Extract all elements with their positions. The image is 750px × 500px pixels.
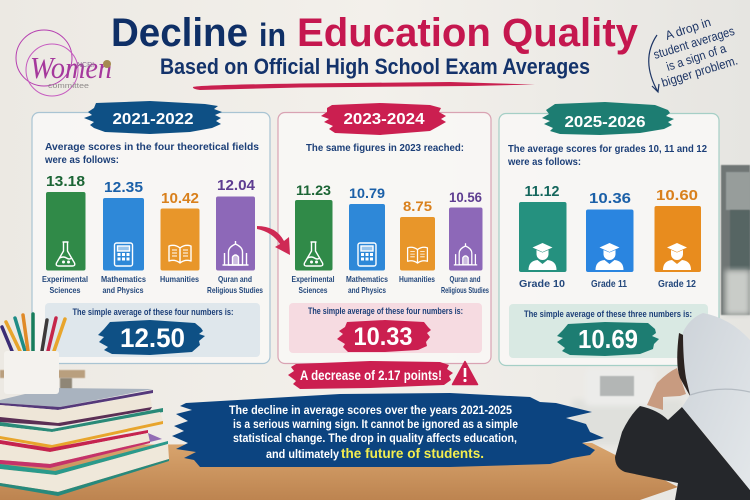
title [111,11,639,55]
bar: Humanities 10.42: Humanities [160,274,199,284]
bar chart: 2023-2024 [292,182,489,295]
bar: Humanities 8.75 [399,198,435,284]
bar: Grade 11 10.36 [586,190,634,290]
panel intro text: The same figures in 2023 reached: [306,142,464,154]
subtitle: Based on Official High School Exam Averages [160,54,590,79]
bar: Mathematics and Physics 12.35: and Physics [102,285,144,295]
average box 2023-2024 [289,303,482,353]
bar: Mathematics and Physics 10.79: and Physics [348,285,386,295]
bar: Quran and Religious Studies 12.04: Religious Studies [207,285,263,295]
bar: Grade 11 10.36: 10.36 [589,190,631,207]
average box 2021-2022: The simple average of these four numbers is: [72,307,234,317]
handwritten note: is a sign of a [665,41,728,74]
pencils [2,314,65,351]
bar: Grade 12 10.60: 10.60 [656,187,698,204]
logo: NCRI Women Committee: committee [48,81,89,90]
student figure [615,313,750,500]
book 3 [0,430,162,468]
jacket [615,406,750,500]
note arrow [649,35,659,92]
bar: Quran and Religious Studies 10.56: 10.56 [449,189,482,205]
book 1 [0,388,153,426]
logo: NCRI Women Committee: NCRI [77,62,94,69]
year badge 2025-2026: 2025-2026 [564,114,646,131]
average box 2021-2022: 12.50 [120,323,185,353]
bar: Quran and Religious Studies 10.56 [441,189,489,295]
bar: Grade 10 11.12: 11.12 [524,183,560,200]
average box 2025-2026: 10.69 [578,324,638,354]
year badge 2023-2024: 2023-2024 [344,111,425,128]
logo: NCRI Women Committee: Women [30,50,112,85]
decrease callout: A decrease of 2.17 points! [300,368,442,383]
average box 2021-2022 [45,303,260,357]
arrow between panels [257,226,290,255]
bar: Quran and Religious Studies 12.04: Quran and [218,274,252,284]
bar: Humanities 8.75: 8.75 [403,198,432,214]
handwritten note: A drop in [664,15,713,43]
bar: Experimental Sciences 11.23 [292,182,334,295]
year badge 2023-2024 [321,103,446,135]
average box 2023-2024: 10.33 [354,323,412,351]
bar: Experimental Sciences 13.18: 13.18 [46,173,85,190]
bar chart: 2021-2022 [42,173,263,295]
message banner [172,393,604,467]
panel intro text: were as follows: [44,154,119,166]
bar chart: 2025-2026 [519,183,701,290]
bar: Humanities 8.75: Humanities [399,274,435,284]
bar: Experimental Sciences 11.23: Experimental [292,274,334,284]
bar: Mathematics and Physics 10.79 [346,185,388,295]
message banner: statistical change. The drop in quality affects education, [233,433,517,445]
bar: Grade 12 10.60: Grade 12 [658,279,696,290]
panel intro text [507,143,707,168]
hand [647,368,686,410]
bar: Experimental Sciences 13.18 [42,173,88,295]
bar: Humanities 10.42 [160,190,200,284]
books stack [0,388,169,496]
year badge 2025-2026 [542,102,674,135]
decrease callout [288,361,478,389]
bar: Grade 10 11.12 [519,183,566,290]
bar: Quran and Religious Studies 12.04 [207,177,263,295]
bar: Mathematics and Physics 12.35: 12.35 [104,179,143,196]
cup [4,351,59,394]
bar: Quran and Religious Studies 10.56: Religious Studies [441,285,489,295]
bar: Mathematics and Physics 10.79: Mathematics [346,274,388,284]
handwritten note: bigger problem. [660,53,739,90]
panel intro text: Average scores in the four theoretical fields [45,141,259,153]
message banner: The decline in average scores over the years 2021-2025 [229,405,513,417]
bar: Grade 11 10.36: Grade 11 [591,279,627,290]
panel intro text: were as follows: [507,156,581,168]
message banner: and ultimately [266,449,340,461]
handwritten note: student averages [652,24,736,62]
bar: Quran and Religious Studies 12.04: 12.04 [217,177,256,194]
bar: Mathematics and Physics 12.35: Mathematics [101,274,146,284]
panel: 2023-2024 [278,103,491,364]
average box 2025-2026 [509,304,708,358]
panel intro text: The average scores for grades 10, 11 and 12 [508,143,707,155]
bar: Experimental Sciences 11.23: 11.23 [296,182,331,198]
handwritten note [649,15,739,92]
bar: Grade 10 11.12: Grade 10 [519,279,565,290]
wooden desk [0,443,678,500]
title: in [259,17,286,53]
panel: 2025-2026 [499,102,719,366]
icon: warning triangle [452,362,478,384]
bar: Experimental Sciences 13.18: Experimental [42,274,88,284]
panel: 2021-2022 [32,101,270,364]
logo: NCRI Women Committee [16,30,112,96]
subtitle underline brush [193,82,535,90]
bar: Mathematics and Physics 10.79: 10.79 [349,185,385,201]
year badge 2021-2022 [84,101,222,134]
book 2 [0,408,163,448]
hair [677,333,694,396]
bar: Grade 12 10.60 [654,187,701,290]
message banner: the future of students. [341,446,484,461]
bar: Humanities 10.42: 10.42 [161,190,199,207]
title: Education Quality [297,11,639,55]
bar: Quran and Religious Studies 10.56: Quran and [450,274,480,284]
bar: Experimental Sciences 13.18: Sciences [50,285,81,295]
book 4 [0,441,169,496]
message banner: is a serious warning sign. It cannot be ignored as a simple [233,419,518,431]
average box 2025-2026: The simple average of these three numbers is: [524,309,692,319]
pencil cup [2,314,65,394]
scarf [682,313,750,490]
bar: Mathematics and Physics 12.35 [101,179,146,295]
average box 2023-2024: The simple average of these four numbers is: [308,306,463,316]
year badge 2021-2022: 2021-2022 [112,111,194,128]
panel intro text [44,141,259,166]
bar: Experimental Sciences 11.23: Sciences [298,285,328,295]
title: Decline [111,11,248,55]
